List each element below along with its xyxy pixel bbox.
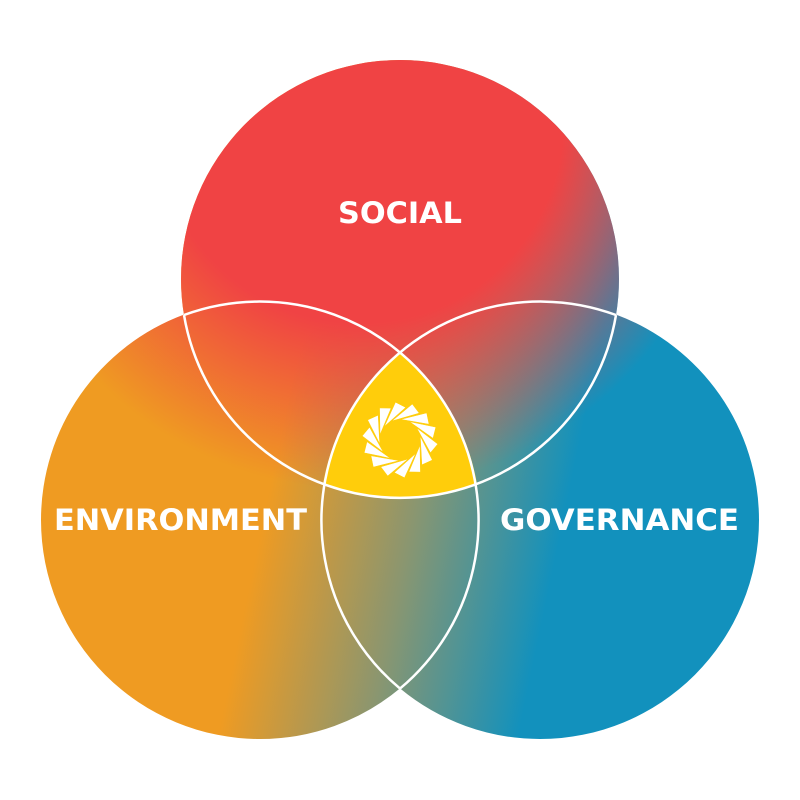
label: environment: ENVIRONMENT (54, 503, 307, 537)
circle outlines: inner white arcs (184, 302, 616, 689)
venn background: blended circles (41, 60, 759, 739)
label: social: SOCIAL (338, 196, 462, 230)
center intersection: yellow (323, 352, 477, 498)
icon: sun swirl logo (360, 399, 440, 481)
label: governance: GOVERNANCE (500, 503, 739, 537)
